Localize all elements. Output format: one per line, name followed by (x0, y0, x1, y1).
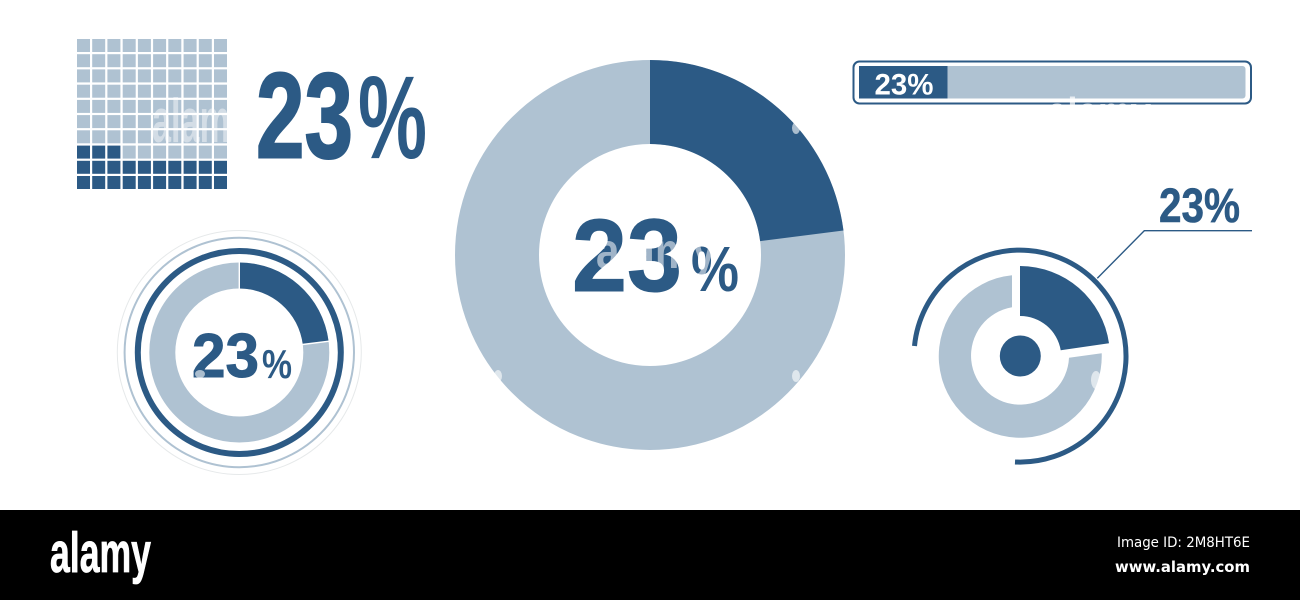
central donut value: % (691, 233, 739, 305)
right radial chart (914, 250, 1126, 462)
footer website: www.alamy.com (1115, 558, 1250, 576)
bar watermark: alamy (1047, 91, 1151, 133)
central donut chart (497, 60, 843, 408)
footer bar (0, 510, 1300, 600)
left donut value: 23 (192, 322, 259, 391)
progress bar: 23% (874, 68, 934, 102)
footer logo: alamy (50, 521, 151, 585)
callout leader line (1097, 231, 1252, 278)
small watermark traces (195, 122, 1101, 389)
central watermark: alamy (596, 223, 716, 279)
left concentric donut chart (117, 230, 361, 474)
central donut value: 23 (572, 198, 682, 313)
right callout value: 23% (1159, 180, 1240, 233)
central donut value (572, 198, 739, 313)
footer image id: Image ID: 2M8HT6E (1117, 535, 1250, 551)
left donut value: % (262, 341, 292, 387)
waffle watermark: alam (152, 87, 230, 156)
waffle chart: 23 of 100 cells (77, 39, 227, 189)
progress bar (854, 62, 1251, 104)
large 23% value beside the waffle: 23 (256, 48, 353, 184)
left donut value (192, 322, 292, 391)
large 23% value beside the waffle: % (358, 52, 427, 184)
